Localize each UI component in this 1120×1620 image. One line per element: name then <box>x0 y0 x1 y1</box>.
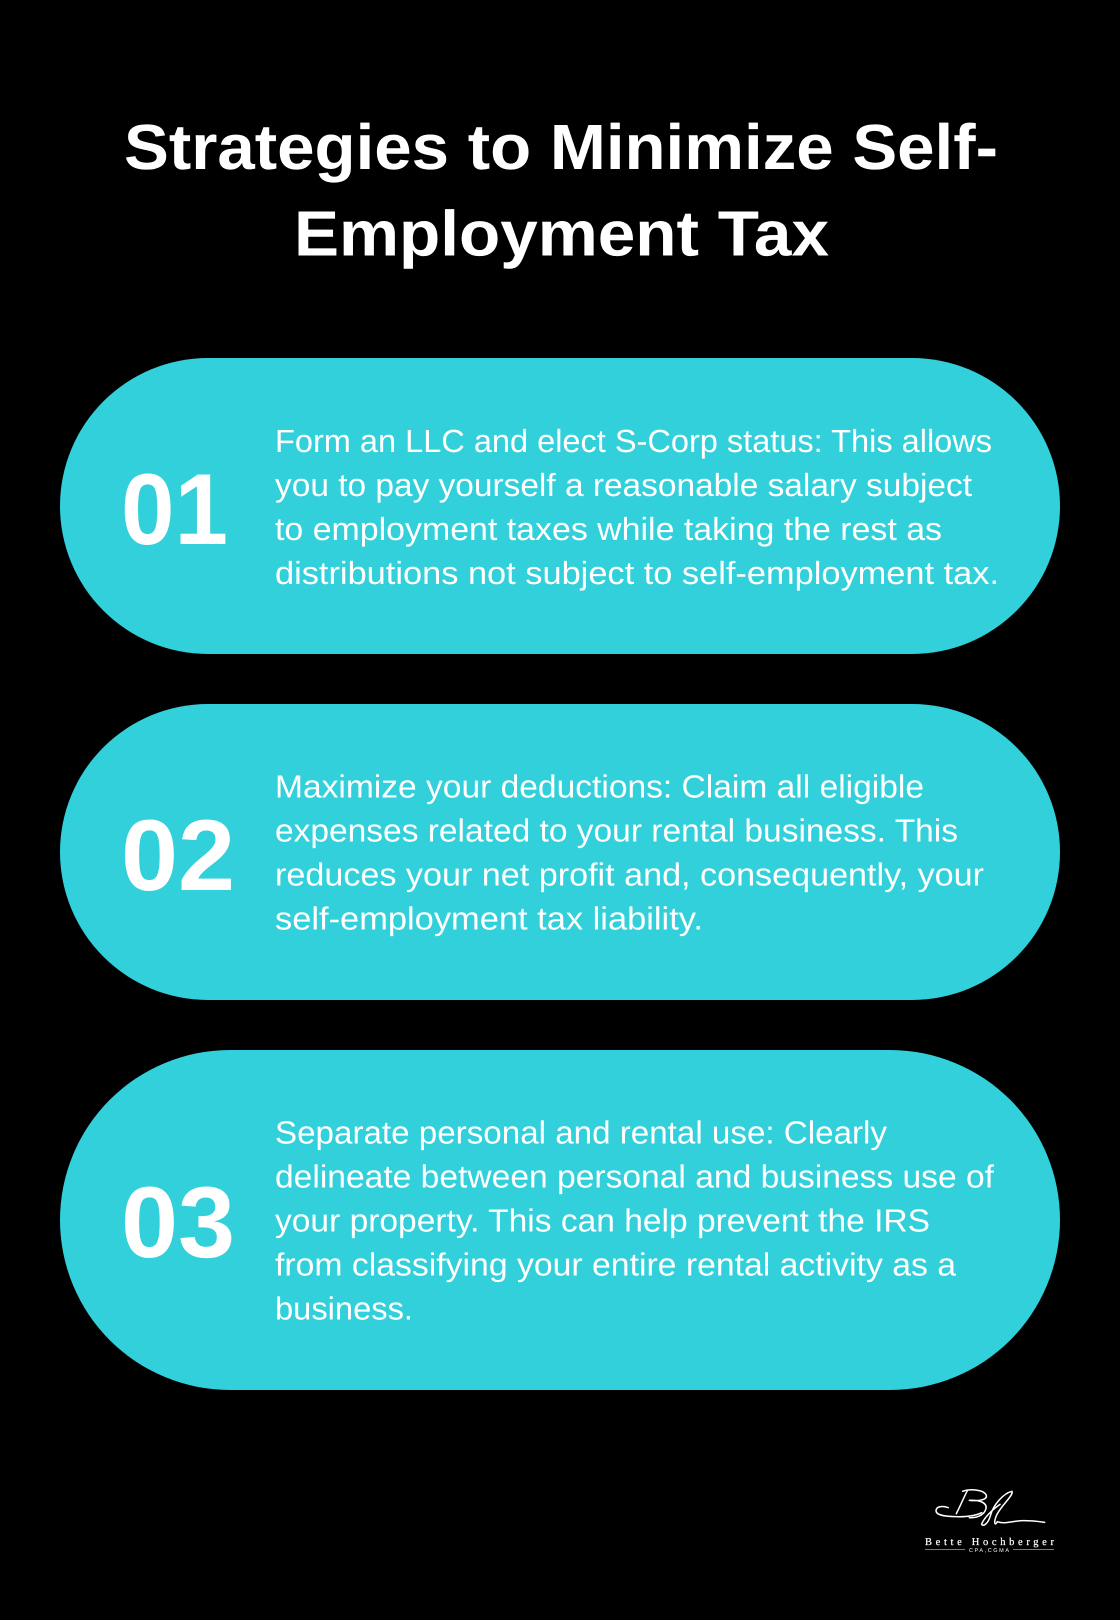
number 01: 01 <box>121 454 228 566</box>
text block: strategy 03: from classifying your entire rental activity as a <box>275 1246 956 1282</box>
title: Employment Tax <box>294 198 829 270</box>
text block: strategy 02: Maximize your deductions: Claim all eligible <box>275 768 924 804</box>
text block: strategy 02: self-employment tax liability. <box>275 900 703 936</box>
title: Strategies to Minimize Self- <box>124 111 998 183</box>
panel: strategy 03 <box>60 1050 1060 1390</box>
text block: strategy 03: your property. This can help prevent the IRS <box>275 1202 930 1238</box>
text block: strategy 03: Separate personal and rental use: Clearly <box>275 1114 887 1150</box>
logo: Bette Hochberger CPA, CGMA <box>925 1490 1054 1554</box>
logo credentials: CPA,CGMA <box>969 1548 1009 1554</box>
text block: strategy 03 <box>275 1114 994 1326</box>
logo name: Bette Hochberger <box>925 1537 1054 1548</box>
text block: strategy 01: to employment taxes while taking the rest as <box>275 511 942 547</box>
text block: strategy 03: delineate between personal and business use of <box>275 1158 994 1194</box>
panel: strategy 02 <box>60 704 1060 1000</box>
number 03: 03 <box>121 1167 235 1279</box>
text block: strategy 01: you to pay yourself a reasonable salary subject <box>275 467 972 503</box>
text block: strategy 01: distributions not subject to self-employment tax. <box>275 555 999 591</box>
text block: strategy 02 <box>275 768 984 936</box>
text block: strategy 01 <box>275 423 999 591</box>
panel: strategy 01 <box>60 358 1060 654</box>
title <box>124 111 998 270</box>
text block: strategy 01: Form an LLC and elect S-Corp status: This allows <box>275 423 992 459</box>
text block: strategy 02: reduces your net profit and, consequently, your <box>275 856 984 892</box>
icon: BH signature <box>936 1490 1045 1525</box>
text block: strategy 03: business. <box>275 1290 413 1326</box>
number 02: 02 <box>121 800 235 912</box>
text block: strategy 02: expenses related to your rental business. This <box>275 812 958 848</box>
